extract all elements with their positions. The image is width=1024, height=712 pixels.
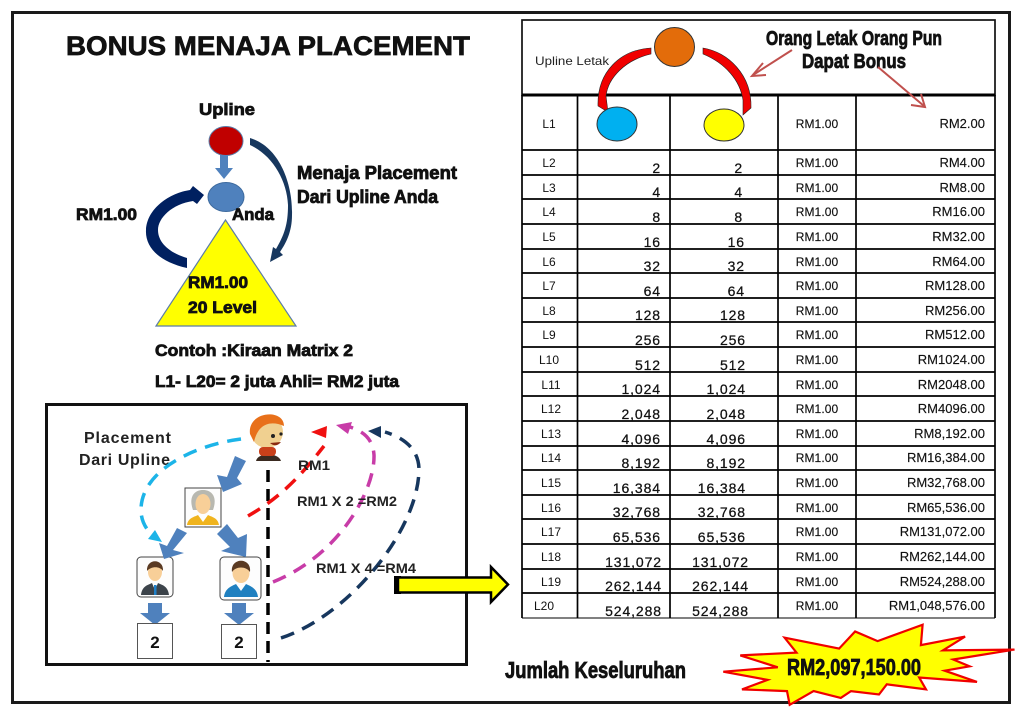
row L3: RM1.00 [796,181,839,195]
label: upline: Upline [199,100,255,119]
row L5: 16 [728,234,745,250]
row L14: 8,192 [706,455,746,471]
icon: orange circle [654,28,694,66]
arrow: callout to arrows [752,50,792,76]
text: total members: L1- L20= 2 juta Ahli= RM2 juta [155,372,400,391]
row L13: RM8,192.00 [914,426,985,441]
row L16: 32,768 [613,504,661,520]
row L14: 8,192 [621,455,661,471]
row L11: L11 [541,378,561,392]
arrow: bonus return curve [146,186,204,268]
row L13: L13 [541,427,561,441]
label: RM1: RM1 [298,457,330,473]
row L10: L10 [539,353,559,367]
row L8: L8 [542,304,556,318]
row L10: RM1.00 [796,353,839,367]
label: 20 level: 20 Level [188,298,257,317]
row L5 [542,229,985,250]
arrow: cyan dashed placement [141,439,241,542]
callout: total starburst [723,625,1014,705]
label: menaja placement: Menaja Placement [297,163,457,183]
callout: orang letak orang [766,28,942,73]
row L20: L20 [534,599,554,613]
arrow: middle to right [217,524,247,557]
row L7: RM1.00 [796,279,839,293]
row L7: L7 [542,279,556,293]
row L12: 2,048 [621,406,661,422]
row L12: RM1.00 [796,402,839,416]
row L3: L3 [542,181,556,195]
panel: bonus table [522,20,995,619]
row L1: RM1.00 [796,117,839,131]
label: placement dari upline [79,430,172,469]
arrow: red dashed RM1 [248,426,327,516]
row L12: L12 [541,402,561,416]
row L2 [542,155,985,176]
row L1: L1 [542,117,556,131]
icon: blue circle [597,107,637,141]
row L18: 131,072 [605,554,662,570]
row L19 [541,574,985,594]
panel: upline diagram [76,100,457,326]
row L17: RM1.00 [796,525,839,539]
row L19: RM524,288.00 [900,574,985,589]
row L15 [541,475,985,496]
row L8 [542,303,985,323]
row L8: RM1.00 [796,304,839,318]
row L6: L6 [542,255,556,269]
row L9: L9 [542,328,556,342]
row L1: RM2.00 [939,116,985,131]
row L13: 4,096 [621,431,661,447]
icon: yellow circle [704,109,744,141]
row L14: RM1.00 [796,451,839,465]
callout: orang letak orang: Dapat Bonus [802,51,906,73]
label: jumlah keseluruhan: Jumlah Keseluruhan [505,657,686,683]
row L1 [542,116,985,131]
row L12: RM4096.00 [918,401,985,416]
row L14 [541,450,985,471]
row L19: L19 [541,575,561,589]
icon: top character [250,414,284,461]
title: BONUS MENAJA PLACEMENT [66,31,471,61]
row L6: 32 [728,258,745,274]
row L19: 262,144 [692,578,749,594]
row L17: RM131,072.00 [900,524,985,539]
row L16: L16 [541,501,561,515]
row L12 [541,401,985,422]
row L9: 256 [720,332,746,348]
row L11: 1,024 [706,381,746,397]
row L5: 16 [644,234,661,250]
row L18 [541,549,985,570]
row L11: RM1.00 [796,378,839,392]
row L8: 128 [635,307,661,323]
row L17: 65,536 [698,529,746,545]
arrow: red left curve [598,48,651,112]
table grid [522,95,995,618]
row L11: RM2048.00 [918,377,985,392]
label: triangle RM1.00: RM1.00 [188,273,248,292]
row L2: L2 [542,156,556,170]
row L8: RM256.00 [925,303,985,318]
label: left RM1.00: RM1.00 [76,205,137,224]
row L16: 32,768 [698,504,746,520]
box: left count: 2 [150,633,160,652]
box: left count [138,624,172,658]
row L4: RM16.00 [932,204,985,219]
arrow: red right curve [703,48,751,115]
row L3: RM8.00 [939,180,985,195]
arrow: callout to bonus [878,67,925,107]
panel: placement tree [46,404,466,664]
line: dashed level divider [266,470,270,662]
row L2: 2 [734,160,743,176]
row L10: 512 [635,357,661,373]
row L17 [541,524,985,545]
row L17: L17 [541,525,561,539]
row L10 [539,352,985,373]
row L8: 128 [720,307,746,323]
row L3 [542,180,985,200]
arrow: navy dashed RM4 [281,426,419,638]
label: anda: Anda [232,205,275,224]
row L6 [542,254,985,274]
icon: male box left [137,557,173,597]
label: placement dari upline: Dari Upline [79,452,170,469]
row L20 [534,598,985,619]
arrow: upline down to anda [215,155,233,179]
row L20: RM1,048,576.00 [889,598,985,613]
row L3: 4 [734,184,743,200]
row L15: 16,384 [698,480,746,496]
row L20: 524,288 [692,603,749,619]
row L18: L18 [541,550,561,564]
label: RM1 x 4: RM1 X 4 =RM4 [316,560,416,576]
icon: anda blue circle [208,182,244,212]
row L16 [541,500,985,520]
row L2: RM1.00 [796,156,839,170]
icon: male box right [220,557,261,600]
arrow: top to middle [217,456,246,492]
row L13: RM1.00 [796,427,839,441]
label: upline letak: Upline Letak [535,54,610,68]
row L4: 8 [734,209,743,225]
arrow: placement curve [250,138,292,262]
row L5: RM32.00 [932,229,985,244]
label: dari upline anda: Dari Upline Anda [297,187,439,207]
table header box [522,20,995,95]
row L11: 1,024 [621,381,661,397]
row L7 [542,278,985,299]
row L19: 262,144 [605,578,662,594]
row L5: RM1.00 [796,230,839,244]
row L9: 256 [635,332,661,348]
row L7: 64 [728,283,745,299]
arrow: right down [224,603,254,625]
row L15: RM1.00 [796,476,839,490]
row L6: RM64.00 [932,254,985,269]
row L5: L5 [542,230,556,244]
callout: orang letak orang: Orang Letak Orang Pun [766,28,942,50]
row L9 [542,327,985,348]
icon: upline red circle [209,126,243,156]
row L7: 64 [644,283,661,299]
row L14: RM16,384.00 [907,450,985,465]
row L20: RM1.00 [796,599,839,613]
row L4: RM1.00 [796,205,839,219]
row L4: L4 [542,205,556,219]
row L11 [541,377,985,397]
row L2: 2 [652,160,661,176]
triangle: 20 level [156,220,296,326]
row L15: RM32,768.00 [907,475,985,490]
row L13 [541,426,985,447]
row L18: RM262,144.00 [900,549,985,564]
row L9: RM512.00 [925,327,985,342]
row L16: RM1.00 [796,501,839,515]
row L15: 16,384 [613,480,661,496]
icon: female box [185,488,221,527]
row L20: 524,288 [605,603,662,619]
row L13: 4,096 [706,431,746,447]
arrow: left down [140,603,170,625]
label: RM1 x 2: RM1 X 2 =RM2 [297,493,397,509]
panel border [46,404,466,664]
row L3: 4 [652,184,661,200]
box: right count: 2 [234,633,244,652]
row L18: RM1.00 [796,550,839,564]
box: right count [222,624,256,658]
row L18: 131,072 [692,554,749,570]
row L10: 512 [720,357,746,373]
row L4: 8 [652,209,661,225]
row L9: RM1.00 [796,328,839,342]
row L6: RM1.00 [796,255,839,269]
arrow: middle to left [159,528,187,559]
row L16: RM65,536.00 [907,500,985,515]
row L2: RM4.00 [939,155,985,170]
row L6: 32 [644,258,661,274]
callout: total starburst: RM2,097,150.00 [787,654,921,680]
row L19: RM1.00 [796,575,839,589]
row L15: L15 [541,476,561,490]
row L4 [542,204,985,225]
row L12: 2,048 [706,406,746,422]
arrow: magenta dashed RM2 [273,422,374,582]
row L10: RM1024.00 [918,352,985,367]
arrow: yellow to table [394,567,508,602]
row L7: RM128.00 [925,278,985,293]
row L17: 65,536 [613,529,661,545]
label: placement dari upline: Placement [84,430,172,447]
text: example calculation: Contoh :Kiraan Matrix 2 [155,341,353,360]
row L14: L14 [541,451,561,465]
